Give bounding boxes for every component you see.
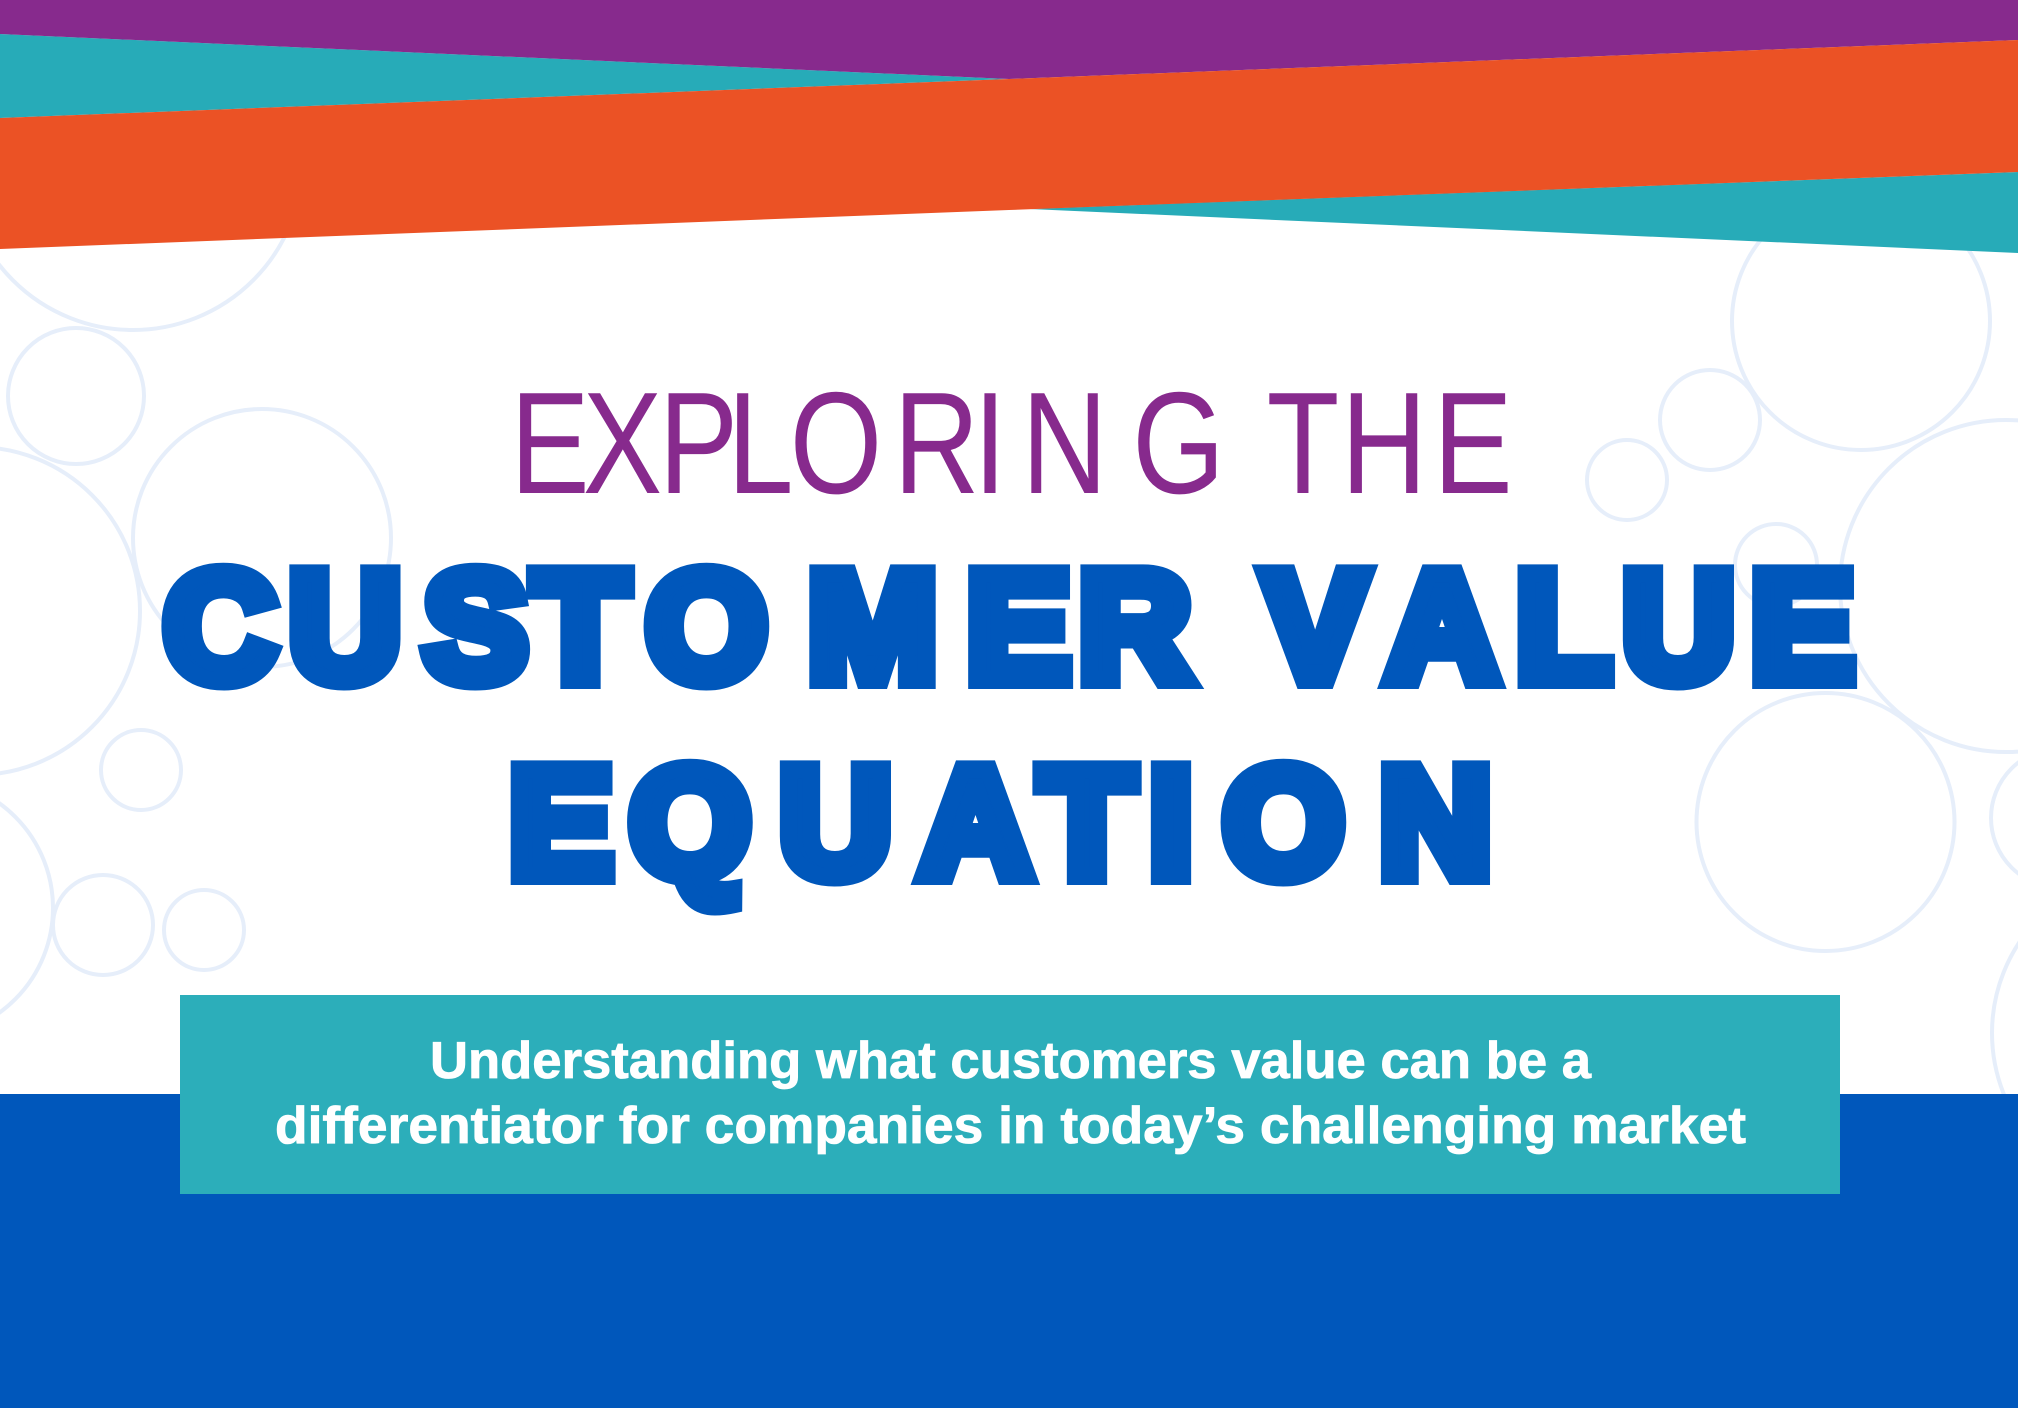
band: purple bbox=[0, 0, 2018, 79]
title line: Customer Value: CUSTOMER VALUE bbox=[164, 540, 1854, 713]
lower blue panel bbox=[0, 1094, 2018, 1408]
title bbox=[164, 363, 1854, 909]
top angled colour bands bbox=[0, 0, 2018, 253]
subtitle line 1: Understanding what customers value can be a bbox=[430, 1032, 1592, 1090]
banner background bbox=[180, 995, 1840, 1194]
band: teal right bbox=[1030, 172, 2018, 253]
title line: Equation: EQUATION bbox=[509, 736, 1491, 909]
band: orange bbox=[0, 40, 2018, 249]
subtitle banner bbox=[180, 995, 1840, 1194]
title line: Exploring the: EXPLORING THE bbox=[510, 363, 1513, 525]
band: teal left bbox=[0, 34, 1009, 118]
subtitle line 2: differentiator for companies in today’s challenging market bbox=[275, 1097, 1746, 1155]
